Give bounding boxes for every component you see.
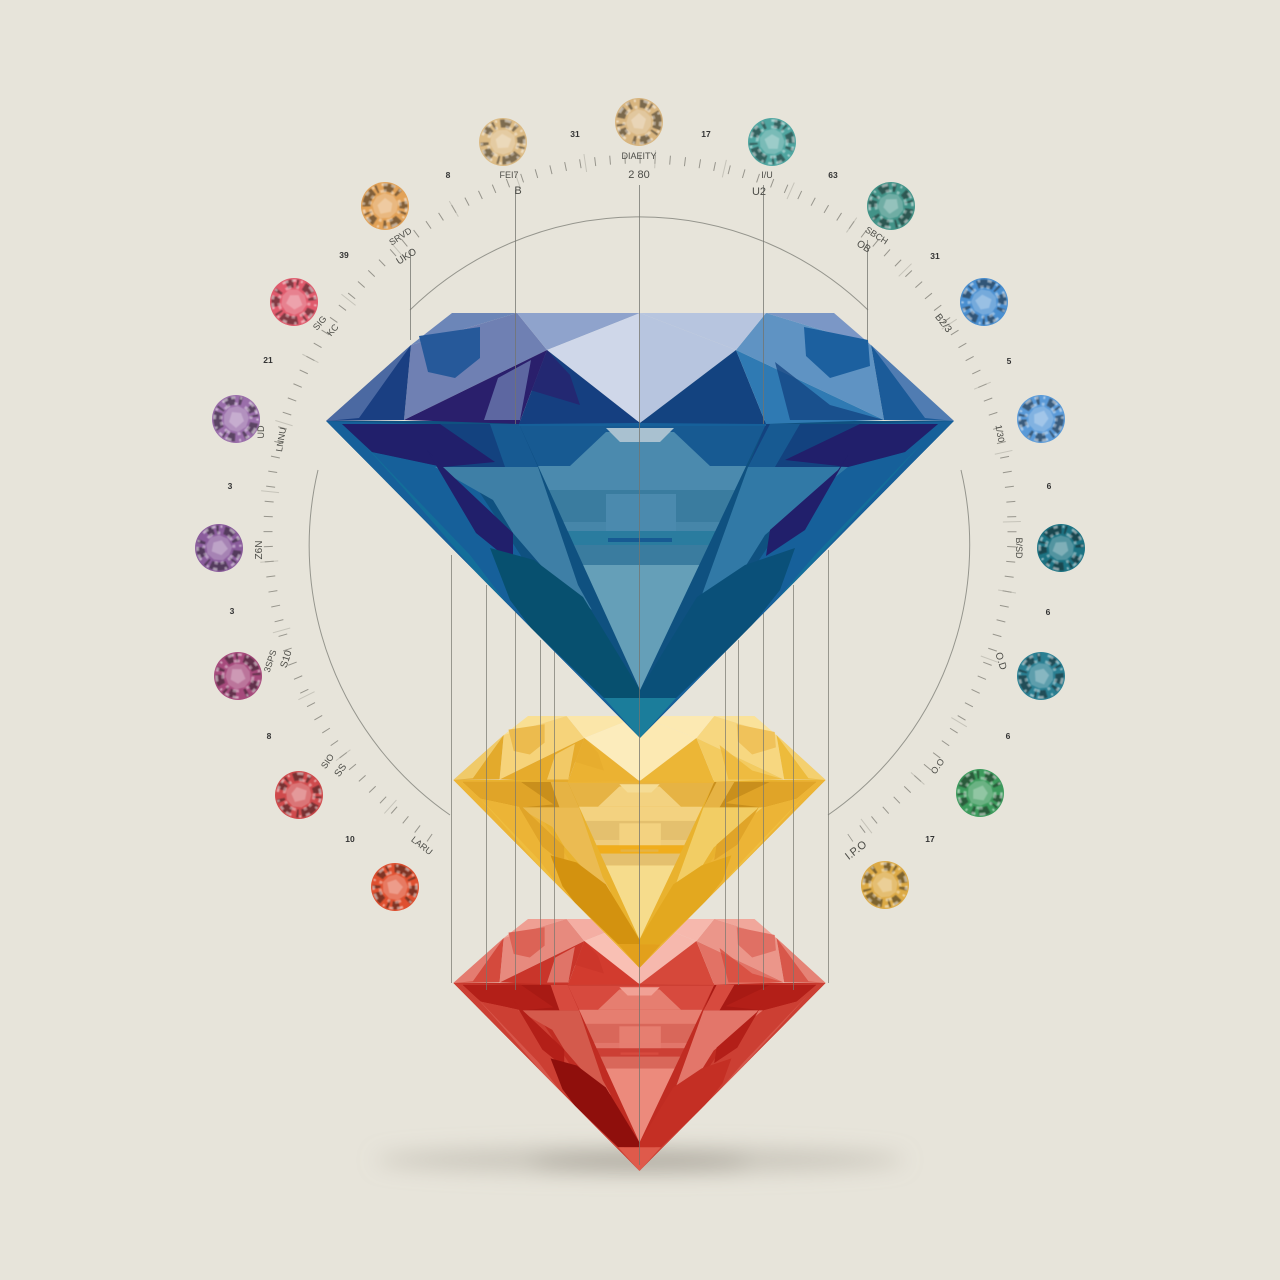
scale labels: B2/3 [932,312,954,335]
number labels: 8 [446,170,451,180]
marker: tan [475,114,531,170]
inner measurement circle arcs [309,217,970,815]
scale labels: O.D [992,651,1008,671]
marker: teal green [861,176,921,236]
number labels: 3 [228,481,233,491]
vertical guide lines above [410,185,868,1165]
marker: orange red [366,858,424,916]
number labels: 39 [339,250,349,260]
marker: dark teal [1033,520,1089,576]
scale labels: SIG [311,314,329,332]
marker: purple [212,395,260,443]
number labels: 17 [925,834,935,844]
gem: red diamond [453,919,826,1171]
number labels: 31 [570,129,580,139]
number labels: 6 [1047,481,1052,491]
marker: magenta [208,646,268,706]
scale labels: B/SD [1014,537,1024,559]
marker: blue [959,277,1009,327]
scale labels: 1/30 [994,424,1006,443]
scale labels: SBCH [863,224,890,246]
marker: tan top [615,98,663,146]
gem: blue diamond [326,313,954,738]
scale labels: U2 [752,186,766,198]
scale labels [254,151,1024,863]
vertical guide lines below blue diamond [452,550,828,990]
scale labels: Z6N [254,541,265,559]
scale labels: LNNU [274,427,288,452]
marker: violet [195,524,243,572]
marker: gold [855,855,915,915]
scale labels: 3SPS [262,649,278,674]
scale labels: OB [854,238,873,256]
number labels: 17 [701,129,711,139]
number labels: 3 [230,606,235,616]
number labels: 6 [1046,607,1051,617]
scale labels: KC [325,322,341,338]
number labels [228,129,1052,844]
scale labels: SIO [319,752,336,771]
scale labels: DIAEITY [621,151,657,161]
scale labels: SRVD [387,225,414,247]
number labels: 31 [930,251,940,261]
number labels: 63 [828,170,838,180]
marker: orange [356,177,414,235]
outer tick ring [268,159,1012,838]
gem: yellow diamond [453,716,826,968]
scale labels: LARU [409,834,434,857]
scale labels: UD [256,425,266,438]
scale labels: S10 [279,649,295,669]
scale labels: SS [333,762,349,779]
marker: pink [266,274,322,330]
scale labels: B [514,185,522,197]
marker: teal blue [1013,648,1069,704]
scale labels: I/U [761,170,773,180]
number labels: 10 [345,834,355,844]
marker: red [270,766,328,824]
number labels: 5 [1007,356,1012,366]
number labels: 21 [263,355,273,365]
marker: teal [742,112,802,172]
marker: light blue [1013,391,1069,447]
scale labels: 2 80 [628,169,650,181]
gem markers ring [195,98,1089,916]
number labels: 6 [1006,731,1011,741]
scale labels: I.P.O [843,838,870,863]
marker: green [950,763,1010,823]
scale labels: O.O [929,757,946,776]
number labels: 8 [267,731,272,741]
scale labels: FEI7 [499,170,519,180]
scale labels: UKO [395,246,419,267]
ground shadow [375,1148,905,1172]
